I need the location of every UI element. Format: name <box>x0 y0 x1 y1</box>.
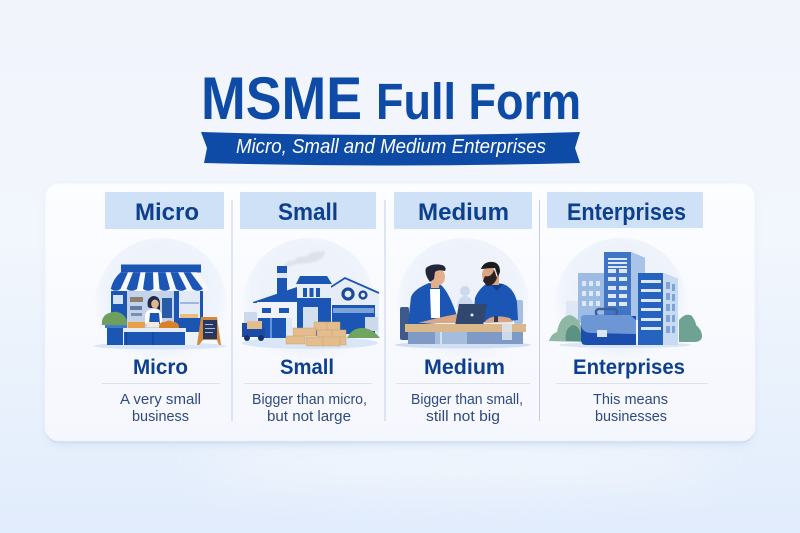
description: Small: but not large <box>267 408 351 425</box>
icon: market stall <box>94 238 227 370</box>
column: Micro <box>94 192 227 425</box>
subtitle ribbon <box>201 132 580 166</box>
header tab: Medium <box>394 192 532 229</box>
icon: office buildings and briefcase <box>549 238 702 370</box>
header tab: Enterprises <box>547 192 703 228</box>
name: Medium: Medium <box>424 356 505 379</box>
description: Medium <box>411 391 523 425</box>
subtitle ribbon: Micro, Small and Medium Enterprises <box>236 136 546 158</box>
description: Micro: A very small <box>120 391 201 408</box>
column: Small <box>240 192 380 425</box>
description: Enterprises: businesses <box>595 408 667 425</box>
icon: factory <box>242 238 380 370</box>
header tab: Small <box>240 192 376 229</box>
icon: two people at a desk <box>395 238 531 370</box>
header tab: Enterprises: Enterprises <box>567 199 686 226</box>
name: Small: Small <box>280 356 334 379</box>
description: Medium: Bigger than small, <box>411 391 523 408</box>
description: Small <box>252 391 367 425</box>
header tab: Medium: Medium <box>418 199 509 226</box>
header tab: Micro: Micro <box>135 199 199 226</box>
title <box>201 65 581 132</box>
column: Enterprises <box>547 192 708 425</box>
title: Full Form <box>376 73 581 130</box>
name: Enterprises: Enterprises <box>573 356 685 379</box>
description: Enterprises <box>593 391 668 425</box>
description: Micro: business <box>132 408 189 425</box>
main card <box>45 183 755 444</box>
description: Medium: still not big <box>426 408 500 425</box>
header tab: Micro <box>105 192 224 229</box>
description: Micro <box>120 391 201 425</box>
name: Micro: Micro <box>133 356 188 379</box>
description: Small: Bigger than micro, <box>252 391 367 408</box>
header tab: Small: Small <box>278 199 338 226</box>
description: Enterprises: This means <box>593 391 668 408</box>
column: Medium <box>394 192 532 425</box>
title: MSME <box>201 65 362 132</box>
